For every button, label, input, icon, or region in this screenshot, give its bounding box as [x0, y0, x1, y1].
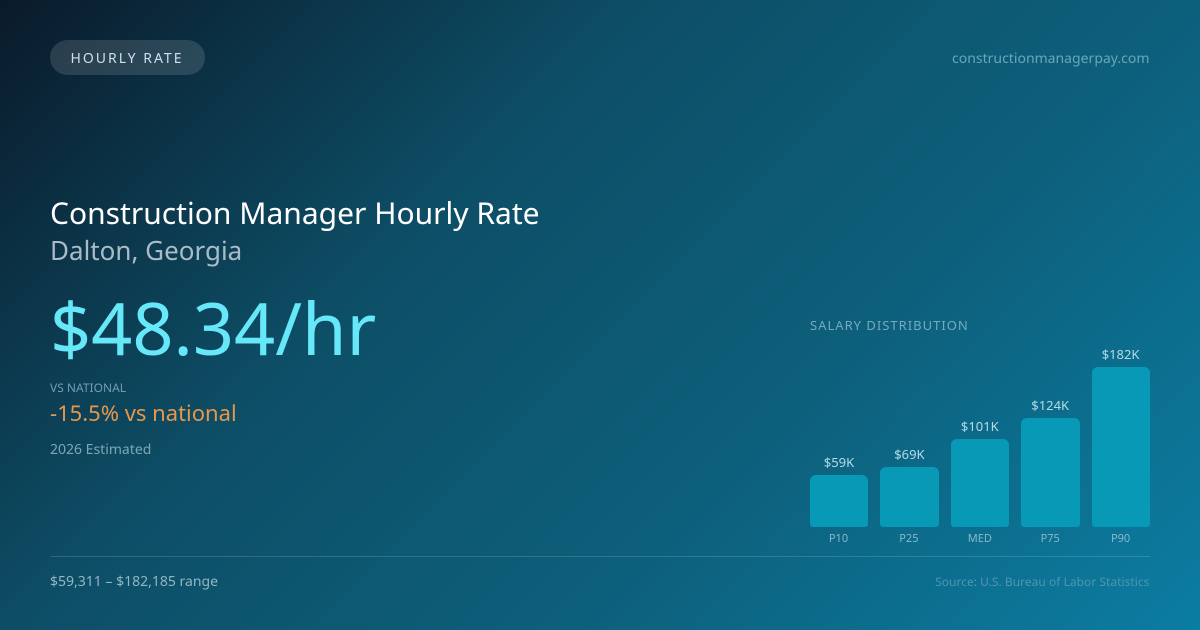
bar: P25: P25	[899, 531, 919, 546]
title: Construction Manager Hourly Rate	[50, 192, 540, 233]
vs national label: VS NATIONAL	[50, 379, 126, 396]
bar: P90: $182K	[1102, 345, 1139, 363]
bar: P75: $124K	[1031, 396, 1069, 414]
site domain: constructionmanagerpay.com	[952, 49, 1149, 68]
estimate year: 2026 Estimated	[50, 440, 151, 459]
badge: hourly rate: HOURLY RATE	[70, 49, 183, 68]
bar: MED	[951, 417, 1009, 546]
panel: salary distribution chart	[810, 316, 1150, 546]
salary range: $59,311 – $182,185 range	[50, 572, 218, 591]
subtitle: Dalton, Georgia	[50, 232, 242, 268]
bar: P75: P75	[1041, 531, 1060, 546]
badge: hourly rate	[50, 40, 205, 75]
bar: P10	[810, 453, 868, 546]
bar: P90	[1092, 345, 1150, 546]
bar: P25	[880, 445, 939, 546]
bar: P10: P10	[829, 531, 848, 546]
bar: P25: $69K	[894, 445, 925, 463]
bar: MED: MED	[968, 531, 992, 546]
chart heading: SALARY DISTRIBUTION	[810, 316, 969, 334]
bar: MED: $101K	[961, 417, 999, 435]
hourly rate value: $48.34/hr	[50, 279, 376, 377]
bar: P75	[1021, 396, 1080, 546]
bar: P90: P90	[1111, 531, 1130, 546]
source: Source: U.S. Bureau of Labor Statistics	[935, 573, 1149, 590]
vs national value: -15.5% vs national	[50, 398, 237, 428]
bar: P10: $59K	[824, 453, 854, 471]
